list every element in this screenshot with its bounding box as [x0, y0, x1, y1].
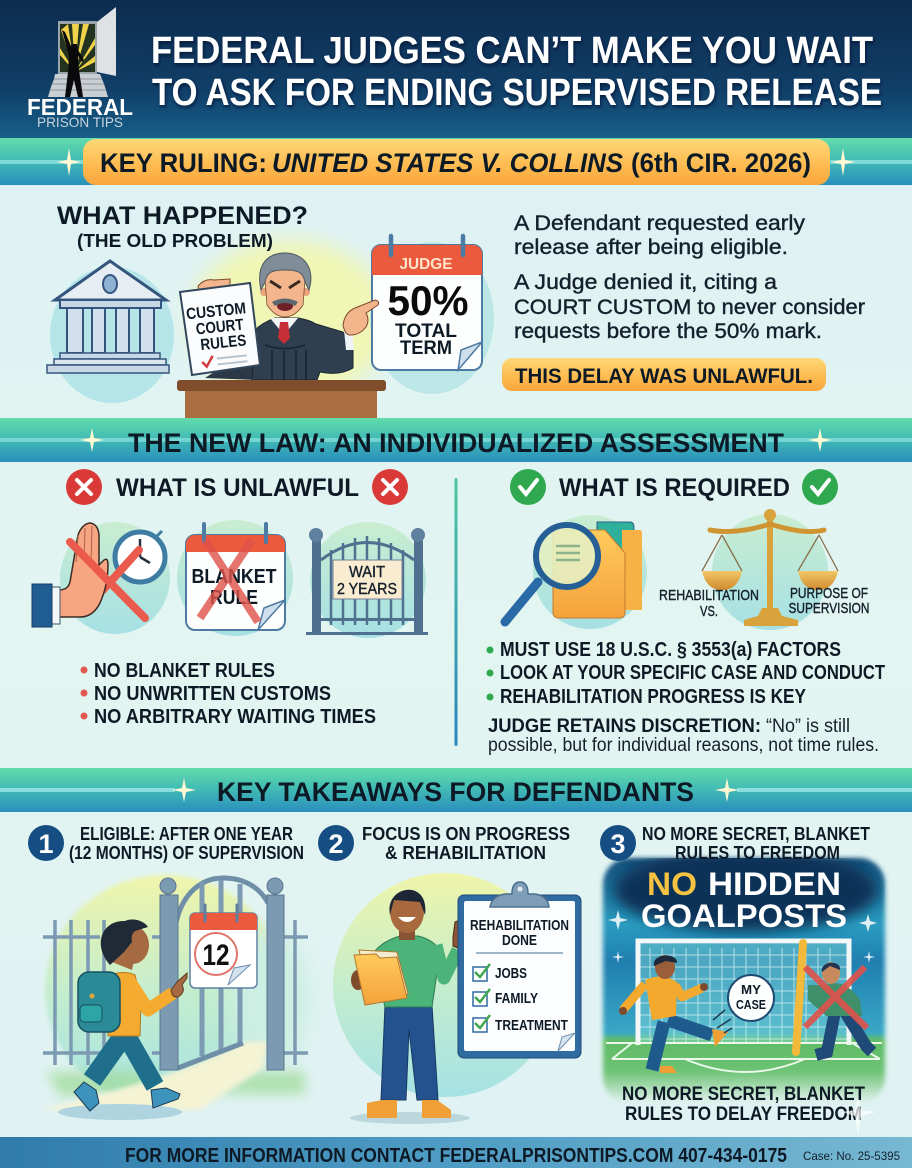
headline: no hidden goalposts: GOALPOSTS [641, 898, 847, 934]
callout: delay unlawful [502, 358, 826, 391]
document: custom court rules: RULES [200, 332, 247, 354]
icon: gate wait 2 years [306, 522, 428, 638]
text: judge retains discretion: possible, but for individual reasons, not time rules. [488, 735, 879, 756]
heading 1 [69, 824, 304, 863]
illustration: person with folder [333, 873, 557, 1124]
caption: no more secret: NO MORE SECRET, BLANKET [622, 1084, 865, 1105]
takeaway 3: no hidden goalposts [600, 824, 885, 1135]
checklist item: treatment [473, 1015, 568, 1034]
orange pill [83, 139, 830, 185]
logo: Federal Prison Tips: PRISON TIPS [37, 114, 123, 130]
logo: Federal Prison Tips [27, 7, 133, 130]
banner heading: THE NEW LAW: AN INDIVIDUALIZED ASSESSMENT [128, 428, 785, 458]
text: what happened description [514, 212, 865, 343]
footer [0, 1137, 912, 1168]
takeaway 2: focus on progress [318, 824, 581, 1124]
takeaway 1: eligible after one year [28, 824, 310, 1120]
text: what happened description: release after being eligible. [514, 236, 788, 259]
sparkle left [80, 428, 104, 452]
icon: calendar 50% total term: TERM [400, 338, 452, 359]
ruling text: UNITED STATES V. COLLINS [272, 148, 623, 178]
banner: key takeaways [0, 768, 912, 812]
number badge 3: 3 [610, 829, 626, 859]
icon: scales of justice [702, 509, 838, 630]
heading: what is required: WHAT IS REQUIRED [559, 474, 790, 502]
document: custom court rules [180, 279, 260, 375]
icon: hand and clock [32, 522, 170, 634]
checklist item: jobs [473, 964, 527, 982]
banner heading: KEY TAKEAWAYS FOR DEFENDANTS [217, 777, 694, 807]
text: scale labels: SUPERVISION [788, 600, 870, 617]
heading: what is unlawful: WHAT IS UNLAWFUL [116, 474, 359, 502]
heading: what happened [57, 202, 308, 251]
moved goalpost [796, 943, 803, 1052]
glow behind illustration [190, 240, 390, 400]
defender [808, 962, 872, 1055]
panel: soccer scene [603, 848, 885, 1103]
icon: gate wait 2 years: 2 YEARS [337, 581, 397, 598]
icon: calendar 50% total term: 50% [388, 277, 468, 324]
ball: my case [728, 975, 774, 1021]
checklist item: treatment: TREATMENT [495, 1017, 568, 1034]
heading: what happened: (THE OLD PROBLEM) [77, 231, 273, 251]
podium [177, 380, 386, 418]
text: judge retains discretion: JUDGE RETAINS DISCRETION: [488, 716, 761, 737]
illustration: person walking through gate [40, 875, 310, 1120]
text: judge retains discretion [488, 716, 879, 756]
calendar 12: 12 [202, 939, 230, 972]
document: custom court rules: CUSTOM [185, 300, 247, 323]
text: what happened description: requests before the 50% mark. [514, 320, 822, 343]
boy [74, 920, 187, 1111]
panel: what is unlawful [32, 469, 428, 728]
heading 2: & REHABILITATION [385, 843, 546, 863]
kicker [619, 955, 728, 1073]
checklist item: family [473, 989, 538, 1007]
accent line right [737, 788, 912, 792]
stadium sparkles [608, 910, 877, 963]
dark headline backdrop [614, 848, 878, 932]
heading: what is unlawful [66, 469, 408, 505]
number badge 2: 2 [328, 829, 344, 859]
text: scale labels: VS. [700, 603, 718, 620]
list: required items [486, 639, 885, 708]
clipboard: rehabilitation done [458, 882, 581, 1058]
ball: my case: CASE [736, 998, 766, 1012]
sparkle right [831, 148, 855, 176]
red x [805, 967, 867, 1028]
heading 2: FOCUS IS ON PROGRESS [362, 824, 570, 844]
number badge 2 [318, 825, 354, 861]
heading 3: NO MORE SECRET, BLANKET [642, 824, 870, 844]
sparkle right [808, 428, 832, 452]
contact line: FOR MORE INFORMATION CONTACT FEDERALPRISONTIPS.COM 407-434-0175 [125, 1145, 787, 1167]
header [0, 0, 912, 139]
number badge 3 [600, 825, 636, 861]
list: required items: REHABILITATION PROGRESS IS KEY [500, 686, 807, 708]
callout: delay unlawful: THIS DELAY WAS UNLAWFUL. [515, 365, 813, 388]
icon: gate wait 2 years: WAIT [349, 564, 385, 581]
logo: Federal Prison Tips: FEDERAL [27, 94, 133, 120]
motion lines [713, 1010, 732, 1033]
list: unlawful items: NO UNWRITTEN CUSTOMS [94, 683, 331, 705]
icon: calendar 50% total term [370, 236, 494, 394]
sparkle right [715, 778, 739, 802]
sparkle left [172, 778, 196, 802]
case number: Case: No. 25-5395 [803, 1149, 900, 1163]
number badge 1: 1 [38, 829, 54, 859]
text: scale labels [659, 585, 870, 620]
illustration: judge [205, 253, 379, 380]
caption: no more secret: RULES TO DELAY FREEDOM [625, 1104, 862, 1125]
text: scale labels: PURPOSE OF [790, 585, 868, 602]
banner: key ruling [0, 138, 912, 185]
headline: no hidden goalposts [641, 866, 847, 934]
divider [454, 478, 458, 746]
list: unlawful items: NO BLANKET RULES [94, 660, 275, 682]
title [151, 30, 882, 114]
text: what happened description: COURT CUSTOM to never consider [514, 296, 865, 319]
checklist item: jobs: JOBS [495, 965, 527, 982]
icon: calendar 50% total term: JUDGE [400, 256, 453, 273]
panel: what happened [47, 202, 865, 418]
heading 1: (12 MONTHS) OF SUPERVISION [69, 843, 304, 863]
ruling text: KEY RULING: [100, 148, 267, 178]
heading 3: RULES TO FREEDOM [675, 843, 840, 863]
heading: what is required [510, 469, 838, 505]
icon: blanket rule calendar: RULE [210, 587, 258, 609]
icon: blanket rule calendar: BLANKET [192, 566, 276, 588]
banner: the new law [0, 418, 912, 462]
heading 3 [642, 824, 870, 863]
heading 2 [362, 824, 570, 863]
list: unlawful items [80, 660, 376, 728]
heading: what happened: WHAT HAPPENED? [57, 202, 308, 230]
headline: no hidden goalposts: HIDDEN [708, 866, 841, 902]
list: required items: MUST USE 18 U.S.C. § 3553(a) FACTORS [500, 639, 841, 661]
checklist item: family: FAMILY [495, 990, 538, 1007]
caption: no more secret [622, 1084, 865, 1125]
ruling text: (6th CIR. 2026) [631, 148, 811, 178]
document: custom court rules: COURT [195, 317, 245, 338]
clipboard: rehabilitation done: DONE [502, 932, 537, 949]
goal net [606, 941, 882, 1072]
panel: what is required [486, 469, 885, 756]
number badge 1 [28, 825, 64, 861]
clipboard: rehabilitation done: REHABILITATION [470, 917, 569, 934]
calendar 12 [190, 905, 257, 988]
icon: blanket rule calendar [177, 520, 293, 636]
ball: my case: MY [741, 983, 762, 997]
icon: magnifier and folder [505, 515, 647, 629]
accent line left [0, 788, 175, 792]
ruling text [100, 148, 811, 178]
heading 1: ELIGIBLE: AFTER ONE YEAR [80, 824, 293, 844]
text: what happened description: A Defendant requested early [514, 212, 806, 235]
icon: calendar 50% total term: TOTAL [395, 321, 457, 342]
sparkle left [57, 148, 81, 176]
list: unlawful items: NO ARBITRARY WAITING TIMES [94, 706, 376, 728]
headline: no hidden goalposts: NO [647, 866, 697, 902]
icon: courthouse [47, 261, 174, 403]
text: judge retains discretion: “No” is still [766, 716, 850, 737]
text: what happened description: A Judge denied it, citing a [514, 271, 777, 294]
text: scale labels: REHABILITATION [659, 587, 759, 604]
sparkle [842, 1098, 876, 1135]
